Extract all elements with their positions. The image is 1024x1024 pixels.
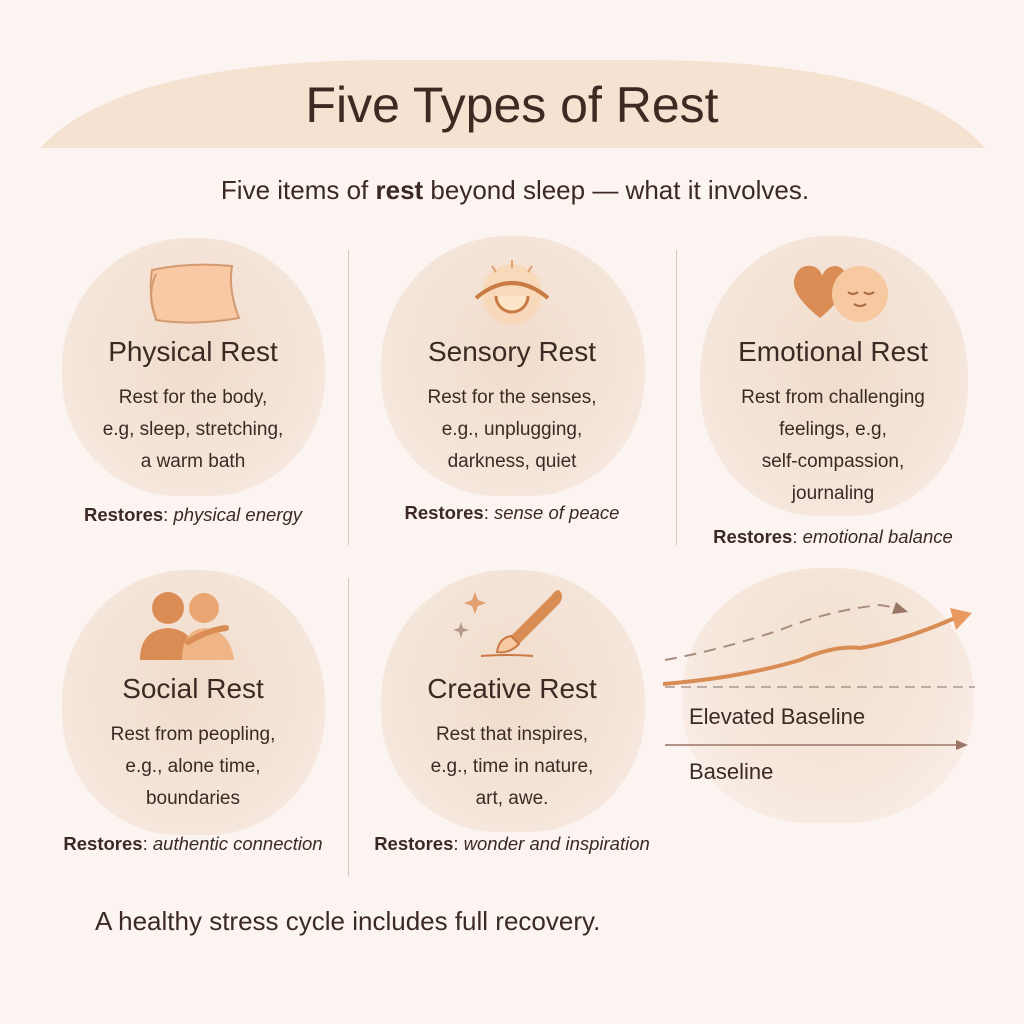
panel: emotional rest — [700, 236, 968, 547]
panel: sensory rest: Sensory Rest — [428, 336, 596, 367]
panel: emotional rest: journaling — [792, 483, 874, 504]
icon: brush and sparkles — [453, 590, 562, 657]
panel: social rest: Restores: authentic connection — [63, 833, 323, 854]
footer text: A healthy stress cycle includes full recovery. — [95, 906, 600, 936]
panel: creative rest: Creative Rest — [427, 673, 597, 704]
panel: physical rest — [62, 238, 325, 525]
label: baseline: Baseline — [689, 759, 773, 784]
panel: social rest: Rest from peopling, — [111, 724, 275, 745]
panel: social rest — [62, 570, 325, 854]
panel: creative rest: Rest that inspires, — [436, 724, 588, 745]
icon: two people — [140, 592, 234, 660]
icon: eye — [474, 260, 550, 324]
panel: sensory rest: e.g., unplugging, — [442, 419, 582, 440]
panel: sensory rest: Rest for the senses, — [428, 387, 596, 408]
panel: emotional rest: Emotional Rest — [738, 336, 928, 367]
chart: elevated baseline — [662, 568, 975, 823]
panel: physical rest: Physical Rest — [108, 336, 278, 367]
panel: emotional rest: Rest from challenging — [741, 387, 925, 408]
panel: physical rest: a warm bath — [141, 451, 245, 472]
panel: emotional rest: feelings, e.g, — [779, 419, 887, 440]
panel: emotional rest: Restores: emotional balance — [713, 526, 953, 547]
panel: emotional rest: self-compassion, — [762, 451, 904, 472]
panel: social rest: e.g., alone time, — [125, 756, 261, 777]
panel: creative rest: Restores: wonder and inspiration — [374, 833, 650, 854]
icon: heart and face — [794, 266, 888, 322]
panel: sensory rest: darkness, quiet — [448, 451, 576, 472]
icon: pillow — [150, 264, 240, 324]
panel: creative rest: art, awe. — [476, 788, 548, 809]
panel: sensory rest: Restores: sense of peace — [405, 502, 619, 523]
subtitle: Five items of rest beyond sleep — what it involves. — [221, 175, 809, 205]
panel: social rest: Social Rest — [122, 673, 264, 704]
label: elevated baseline: Elevated Baseline — [689, 704, 865, 729]
panel: social rest: boundaries — [146, 788, 240, 809]
panel: creative rest: e.g., time in nature, — [431, 756, 593, 777]
panel: sensory rest — [381, 236, 645, 523]
title banner — [40, 60, 985, 148]
panel: physical rest: Restores: physical energy — [84, 504, 302, 525]
panel: creative rest — [374, 570, 650, 854]
title: Five Types of Rest — [305, 77, 719, 133]
panel: physical rest: e.g, sleep, stretching, — [103, 419, 283, 440]
panel: physical rest: Rest for the body, — [119, 387, 267, 408]
